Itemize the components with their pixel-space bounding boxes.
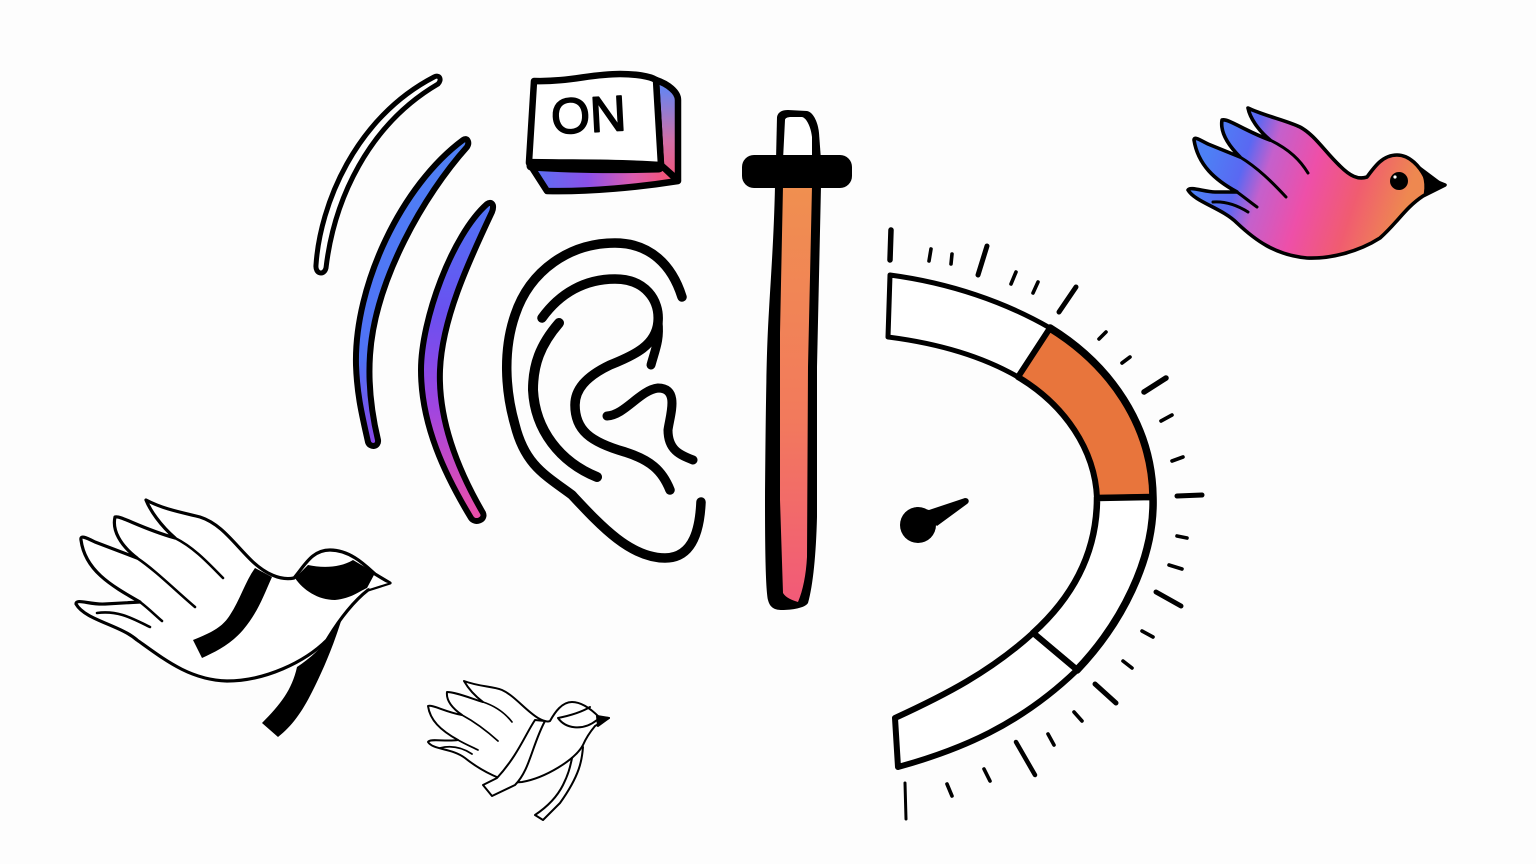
bird beak — [597, 716, 609, 726]
gauge — [888, 230, 1202, 819]
gauge segment: white bottom — [895, 633, 1077, 767]
bird: small outline — [428, 681, 609, 820]
gauge segment: white right — [1033, 497, 1153, 670]
sound wave: inner purple to pink arc — [421, 203, 493, 521]
sound wave: middle blue arc — [356, 139, 468, 446]
bird tail ribbon — [535, 747, 583, 820]
bird tail band — [262, 618, 342, 737]
bird: gradient top right — [1188, 108, 1445, 258]
button: ON — [529, 74, 678, 191]
bird eye mask — [295, 560, 375, 600]
bird beak highlight — [369, 579, 388, 589]
sound wave: outer white arc — [316, 76, 440, 273]
gauge segment: white top — [888, 275, 1050, 377]
bird eye — [1390, 172, 1408, 190]
gauge tick marks — [890, 230, 1202, 819]
bird wing band — [193, 568, 272, 658]
ear — [507, 243, 701, 558]
bird beak — [1417, 164, 1445, 197]
bird ribbon — [483, 720, 545, 796]
slider handle — [742, 155, 852, 188]
gauge needle — [900, 498, 969, 543]
gauge segment: orange active — [1018, 328, 1153, 498]
button label: ON — [550, 85, 627, 145]
bird: black and white large — [76, 500, 390, 737]
volume slider — [742, 110, 852, 610]
bird head — [558, 707, 597, 727]
